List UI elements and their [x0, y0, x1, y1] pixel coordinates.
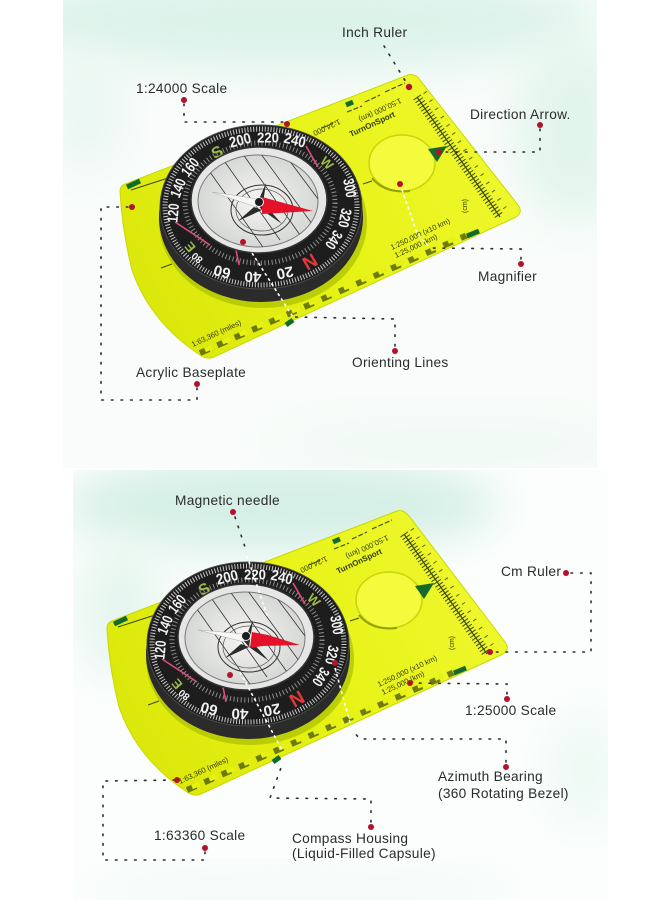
magnifier [369, 135, 435, 191]
capsule ring [178, 584, 314, 690]
label: Compass Housing: Compass Housing [292, 831, 408, 846]
compass body [146, 573, 354, 745]
label: Magnifier [397, 181, 537, 284]
capsule [185, 592, 305, 684]
plate printing: 1:63,360 (miles) [190, 318, 243, 349]
label: Inch Ruler: Inch Ruler [342, 25, 408, 40]
compass rose [231, 183, 293, 235]
rotating bezel face [147, 562, 349, 726]
plate printing: 1:50,000 (km) [357, 96, 403, 124]
plate printing: 1:250,000 (x10 km) [376, 653, 439, 689]
acrylic baseplate [107, 511, 507, 795]
plate printing: 1:63,360 (miles) [177, 755, 230, 786]
label: 1:63360 Scale: 1:63360 Scale [154, 828, 245, 843]
bezel degree numbers: 60 [199, 698, 220, 719]
label: Inch Ruler [342, 25, 412, 90]
label: 1:25000 Scale: 1:25000 Scale [465, 703, 556, 718]
rotating bezel face [160, 125, 362, 289]
label: Orienting Lines [240, 239, 449, 370]
bezel degree numbers: 340 [308, 664, 333, 689]
baseplate markings [127, 83, 505, 353]
plate printing: 1:25,000 (km) [393, 232, 439, 260]
label: Magnetic needle [175, 493, 280, 553]
label: Azimuth Bearing [332, 660, 569, 801]
bezel degree numbers: 240 [269, 567, 295, 589]
plate printing: TurnOnSport [348, 110, 397, 139]
bezel degree numbers: 140 [154, 613, 177, 637]
bezel degree numbers [164, 129, 359, 285]
bezel degree numbers: E [168, 676, 186, 692]
label: Acrylic Baseplate: Acrylic Baseplate [136, 365, 246, 380]
direction arrow [428, 146, 447, 162]
plate printing [177, 533, 456, 786]
baseplate markings [114, 520, 492, 790]
label: Acrylic Baseplate [101, 204, 246, 400]
bezel degree numbers: 220 [257, 129, 279, 146]
bezel degree numbers: W [317, 153, 337, 173]
bezel degree numbers: 40 [231, 704, 249, 722]
plate printing: (cm) [462, 199, 469, 213]
label: 1:25000 Scale [407, 680, 556, 718]
bezel degree numbers: 160 [178, 155, 203, 180]
magnetic needle [212, 192, 313, 214]
label: Cm Ruler: Cm Ruler [501, 564, 561, 579]
label: Compass Housing [227, 672, 436, 861]
dashed guide lines over compass [240, 556, 352, 750]
label: Direction Arrow: Direction Arrow. [470, 107, 571, 122]
bezel degree numbers: 340 [321, 227, 346, 252]
plate printing: 1:50,000 (km) [344, 533, 390, 561]
bezel degree numbers: 20 [275, 262, 295, 282]
label: Cm Ruler [487, 564, 591, 655]
orienting lines [197, 592, 305, 684]
acrylic baseplate [120, 75, 520, 358]
label: Direction Arrow [436, 107, 571, 155]
label: Magnifier: Magnifier [478, 269, 537, 284]
label: Orienting Lines: Orienting Lines [352, 355, 449, 370]
dashed guide lines over compass [252, 253, 293, 317]
bezel degree numbers: 220 [244, 566, 266, 583]
bezel degree numbers: 40 [244, 267, 262, 285]
illustration: top compass [101, 25, 571, 400]
bezel degree numbers: 80 [177, 686, 192, 702]
plate printing: TurnOnSport [335, 547, 384, 576]
bezel degree numbers: N [298, 248, 321, 274]
bezel degree numbers: S [196, 580, 214, 600]
bezel degree numbers: 60 [212, 261, 233, 282]
compass rose [218, 620, 280, 672]
bezel degree numbers: 20 [262, 699, 282, 719]
bezel degree numbers: 320 [334, 207, 355, 229]
plate printing: 1:24,000 [299, 554, 329, 575]
orienting lines [210, 155, 318, 247]
bezel degree numbers: 120 [164, 203, 183, 223]
plate printing: 1:24,000 [312, 117, 342, 138]
plate printing: 1:250,000 (x10 km) [389, 216, 452, 252]
panel: bottom background [60, 455, 625, 900]
magnifier [356, 572, 422, 628]
bezel degree numbers: E [181, 239, 199, 255]
bezel degree numbers: N [285, 685, 308, 711]
rotating bezel side [146, 569, 350, 739]
rotating bezel side [159, 132, 363, 302]
plate printing [190, 96, 469, 349]
bezel degree numbers: 160 [165, 592, 190, 617]
bezel degree numbers: 200 [214, 567, 240, 589]
bezel tick marks [152, 566, 344, 722]
bezel degree numbers: 120 [151, 640, 170, 660]
label: Compass Housing: (Liquid-Filled Capsule) [292, 846, 436, 861]
capsule [198, 155, 318, 247]
direction arrow [415, 583, 434, 599]
bezel degree numbers: W [304, 590, 324, 610]
bezel degree numbers: 320 [321, 644, 342, 666]
label: Azimuth Bearing: (360 Rotating Bezel) [438, 786, 569, 801]
bezel degree numbers: 300 [339, 177, 359, 199]
illustration: bottom compass [103, 493, 591, 861]
label: Magnetic needle: Magnetic needle [175, 493, 280, 508]
bezel degree numbers: 140 [167, 176, 190, 200]
panel: top background [63, 0, 597, 468]
bezel degree numbers: 300 [326, 614, 346, 636]
bezel degree numbers: 200 [227, 130, 253, 152]
label: Azimuth Bearing: Azimuth Bearing [438, 769, 543, 784]
bezel tick marks [165, 129, 357, 285]
compass body [159, 136, 367, 308]
label: 1:24000 Scale [136, 81, 290, 127]
plate printing: (cm) [449, 636, 456, 650]
magnetic needle [198, 630, 300, 648]
bezel degree numbers: 80 [190, 249, 205, 265]
plate printing: 1:25,000 (km) [380, 669, 426, 697]
label: 1:63360 Scale [103, 777, 245, 860]
bezel degree numbers [151, 566, 346, 722]
bezel degree numbers: S [209, 143, 227, 163]
capsule ring [191, 147, 327, 253]
bezel degree numbers: 240 [282, 130, 308, 152]
label: 1:24000 Scale: 1:24000 Scale [136, 81, 227, 96]
